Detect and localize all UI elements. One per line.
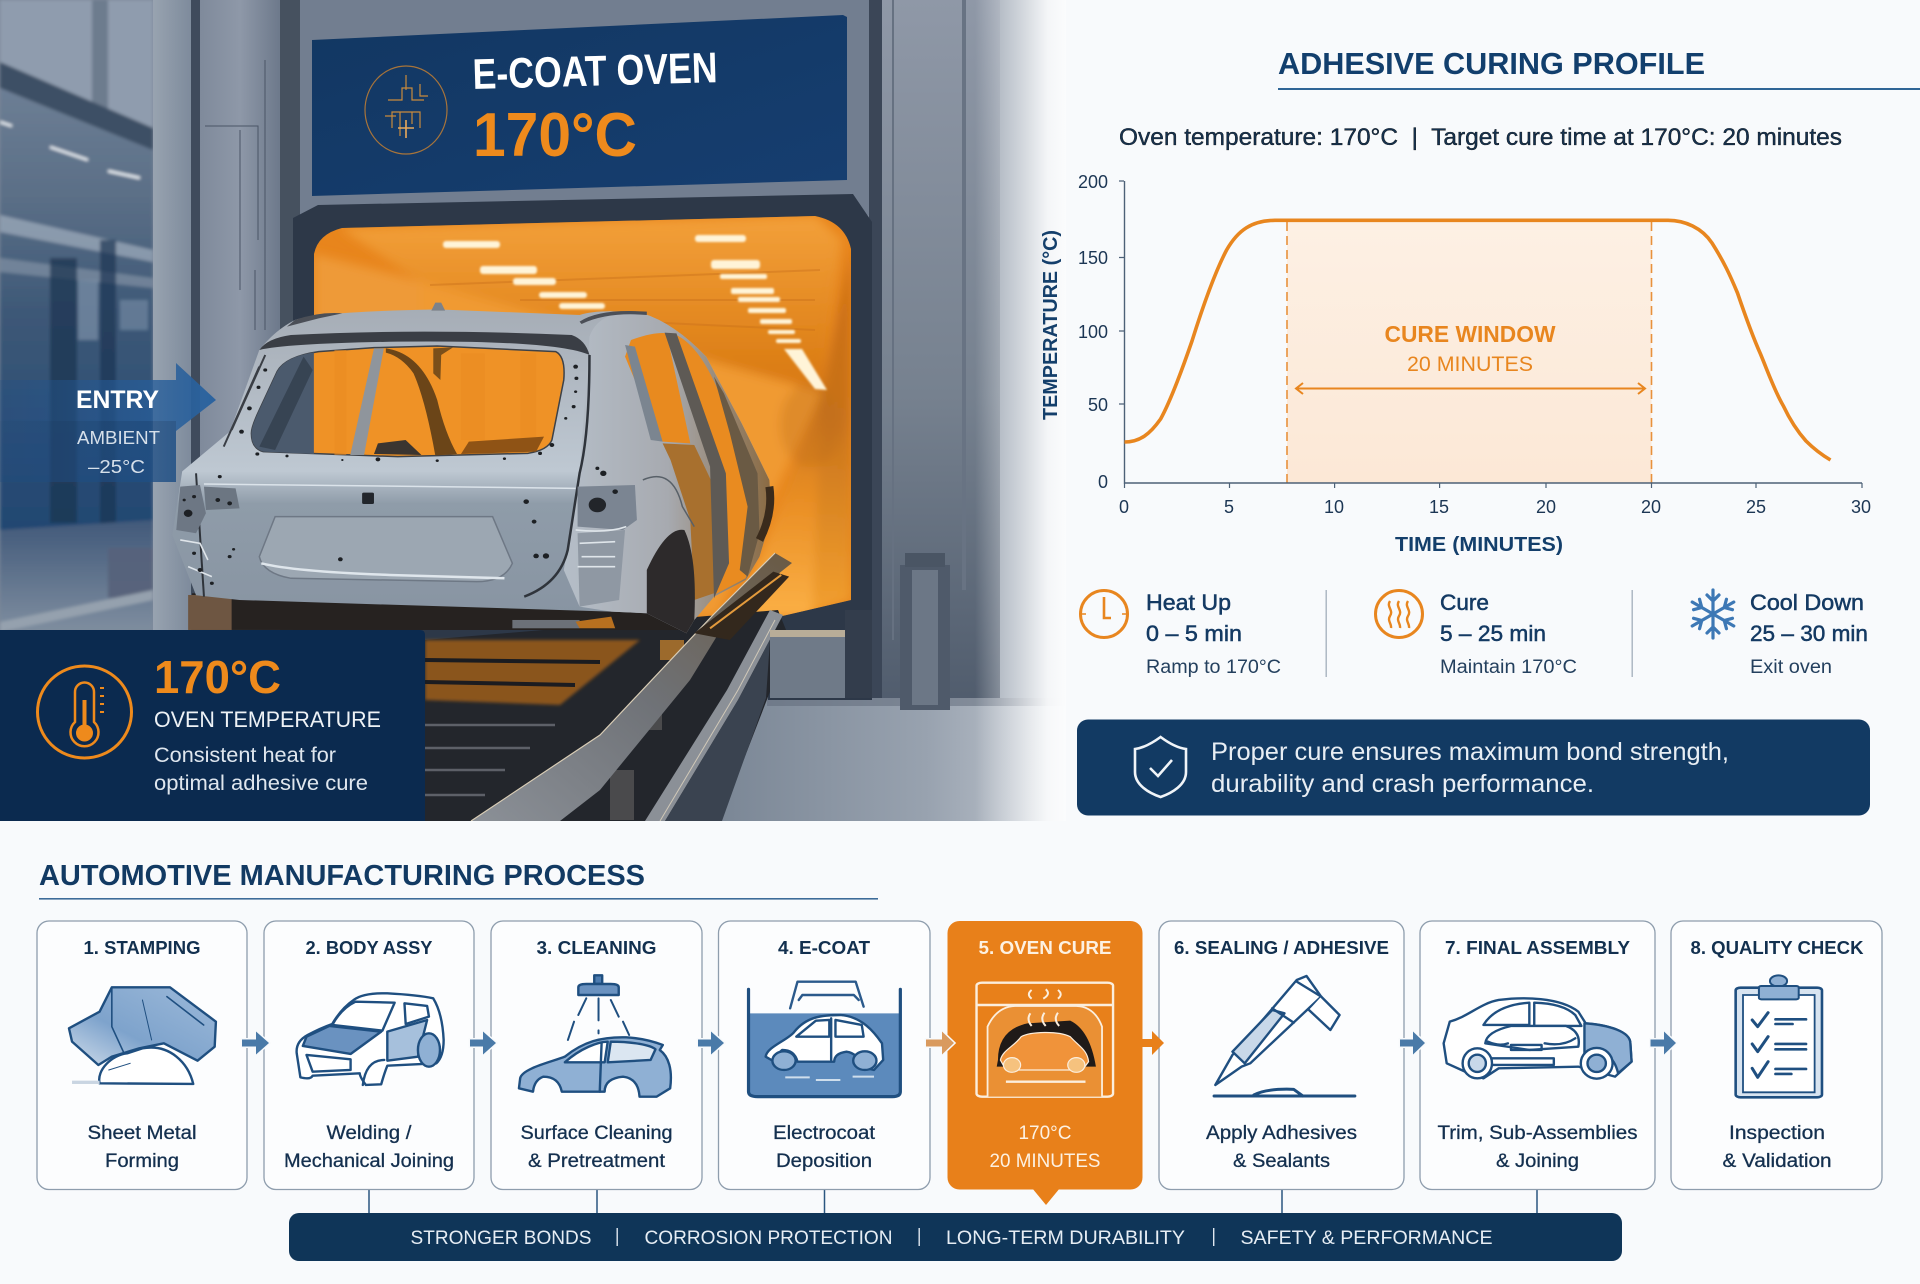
callout: proper cure: Proper cure ensures maximum bond strength, (1211, 738, 1729, 766)
step 6: sealing / adhesive: & Sealants (1233, 1151, 1330, 1172)
icon: shield (1135, 737, 1186, 797)
step 6: sealing / adhesive: 6. SEALING / ADHESIVE (1174, 938, 1389, 958)
banner temperature: 170°C (473, 101, 637, 170)
phase: heat up: Heat Up (1146, 590, 1231, 615)
x axis labels: 0 (1119, 497, 1129, 517)
x axis labels: 10 (1324, 497, 1344, 517)
entry marker: –25°C (88, 457, 145, 477)
panel: oven temperature (0, 630, 425, 821)
step 5: oven cure (highlighted) (948, 921, 1142, 1205)
icon: thermometer (38, 666, 132, 758)
step 7: final assembly: & Joining (1496, 1151, 1579, 1172)
chart subtitle: Oven temperature: 170°C | Target cure time at 170°C: 20 minutes (1119, 124, 1842, 151)
icon: dip tank (749, 982, 900, 1097)
process arrows (242, 1031, 1676, 1055)
step 3: cleaning: 3. CLEANING (536, 938, 656, 958)
benefits bar: LONG-TERM DURABILITY (946, 1227, 1185, 1249)
y axis labels (1078, 172, 1108, 492)
x axis labels (1119, 497, 1871, 517)
phase: heat up: 0 – 5 min (1146, 621, 1242, 646)
step 5: oven cure (highlighted): 170°C (1018, 1123, 1072, 1144)
cure window: CURE WINDOW (1384, 321, 1556, 347)
entry marker: AMBIENT (77, 428, 160, 448)
line chart: adhesive curing profile (1040, 172, 1871, 556)
x axis labels: 15 (1429, 497, 1449, 517)
icon: adhesive gun (1214, 976, 1355, 1096)
panel description (154, 744, 368, 795)
x axis title: TIME (MINUTES) (1395, 534, 1563, 556)
step 3: cleaning: Surface Cleaning (520, 1123, 672, 1144)
step 1: stamping: Sheet Metal (88, 1123, 196, 1144)
step 8: quality check: Inspection (1729, 1123, 1825, 1144)
step 7: final assembly: 7. FINAL ASSEMBLY (1445, 938, 1630, 958)
large temperature: 170°C (154, 651, 281, 703)
step 4: e-coat (718, 921, 930, 1190)
step 2: body assembly: Mechanical Joining (284, 1151, 454, 1172)
car body shell (172, 303, 789, 640)
benefits bar: CORROSION PROTECTION (644, 1227, 892, 1249)
step 1: stamping: 1. STAMPING (84, 938, 200, 958)
x axis labels: 5 (1224, 497, 1234, 517)
step 4: e-coat: 4. E-COAT (778, 938, 870, 958)
icon: snowflake (1689, 590, 1737, 638)
floor equipment (900, 565, 950, 710)
step 8: quality check (1671, 921, 1882, 1190)
phase: cool down: Cool Down (1750, 590, 1864, 615)
icon: car body (297, 993, 444, 1085)
panel label: OVEN TEMPERATURE (154, 707, 381, 732)
icon: clock (1080, 590, 1128, 638)
photo: e-coat oven with car body (0, 0, 1067, 821)
x axis labels: 25 (1746, 497, 1766, 517)
step 2: body assembly: Welding / (326, 1123, 412, 1144)
icon: sheet metal (69, 987, 216, 1084)
conveyor (425, 553, 792, 821)
step 7: final assembly (1420, 921, 1655, 1190)
icon: finished car (1444, 998, 1632, 1079)
step 6: sealing / adhesive (1159, 921, 1404, 1190)
icon: oven with car (977, 983, 1113, 1097)
cure window (1287, 220, 1652, 483)
oven lights (443, 235, 827, 390)
benefits bar: STRONGER BONDS (410, 1227, 592, 1249)
connectors to benefits bar (369, 1189, 1537, 1213)
step 8: quality check: 8. QUALITY CHECK (1690, 938, 1864, 958)
step 2: body assembly: 2. BODY ASSY (306, 938, 432, 958)
x axis labels: 30 (1851, 497, 1871, 517)
callout: proper cure (1077, 720, 1870, 816)
step 7: final assembly: Trim, Sub-Assemblies (1438, 1123, 1638, 1144)
icon: spray over car (519, 975, 671, 1097)
benefits bar (289, 1213, 1622, 1261)
step 8: quality check: & Validation (1722, 1151, 1832, 1172)
phase: heat up (1080, 590, 1281, 678)
step 4: e-coat: Deposition (776, 1151, 872, 1172)
banner emblem (365, 66, 447, 154)
temperature curve (1124, 220, 1830, 460)
step 5: oven cure (highlighted): 5. OVEN CURE (978, 938, 1112, 958)
phase: cool down: 25 – 30 min (1750, 621, 1868, 646)
phase: cool down (1689, 590, 1868, 678)
y axis labels: 100 (1078, 322, 1108, 342)
panel description: optimal adhesive cure (154, 772, 368, 795)
step 3: cleaning (491, 921, 702, 1190)
y axis labels: 50 (1088, 395, 1108, 415)
step 1: stamping: Forming (105, 1151, 179, 1172)
step 4: e-coat: Electrocoat (773, 1123, 876, 1144)
phase: cure: Maintain 170°C (1440, 657, 1577, 678)
panel description: Consistent heat for (154, 744, 336, 767)
x axis labels: 20 (1641, 497, 1661, 517)
phase: cure: 5 – 25 min (1440, 621, 1546, 646)
heading: adhesive curing profile: ADHESIVE CURING PROFILE (1278, 46, 1705, 81)
step 5: oven cure (highlighted): 20 MINUTES (990, 1151, 1100, 1172)
phase: cure: Cure (1440, 590, 1489, 615)
y axis labels: 200 (1078, 172, 1108, 192)
y axis labels: 0 (1098, 472, 1108, 492)
entry marker: ENTRY (76, 386, 159, 414)
phase: cure (1376, 590, 1577, 678)
step 6: sealing / adhesive: Apply Adhesives (1206, 1123, 1357, 1144)
step 1: stamping (37, 921, 247, 1190)
heading: automotive manufacturing process: AUTOMOTIVE MANUFACTURING PROCESS (39, 860, 645, 892)
phase: heat up: Ramp to 170°C (1146, 657, 1281, 678)
y axis title: TEMPERATURE (°C) (1040, 230, 1062, 420)
benefits bar: SAFETY & PERFORMANCE (1240, 1227, 1492, 1249)
phase: cool down: Exit oven (1750, 657, 1832, 678)
icon: clipboard (1736, 975, 1822, 1097)
factory floor fade into white (975, 0, 1066, 821)
oven base block (770, 637, 845, 698)
cure window: 20 MINUTES (1407, 353, 1533, 376)
oven interior (310, 210, 860, 620)
callout: proper cure: durability and crash performance. (1211, 770, 1594, 798)
x axis labels: 20 (1536, 497, 1556, 517)
step 3: cleaning: & Pretreatment (528, 1151, 666, 1172)
step 2: body assembly (264, 921, 474, 1190)
banner title: E-COAT OVEN (472, 44, 718, 99)
y axis labels: 150 (1078, 248, 1108, 268)
entry marker (0, 363, 216, 482)
icon: heat waves (1376, 590, 1422, 638)
banner: e-coat oven (312, 15, 847, 196)
